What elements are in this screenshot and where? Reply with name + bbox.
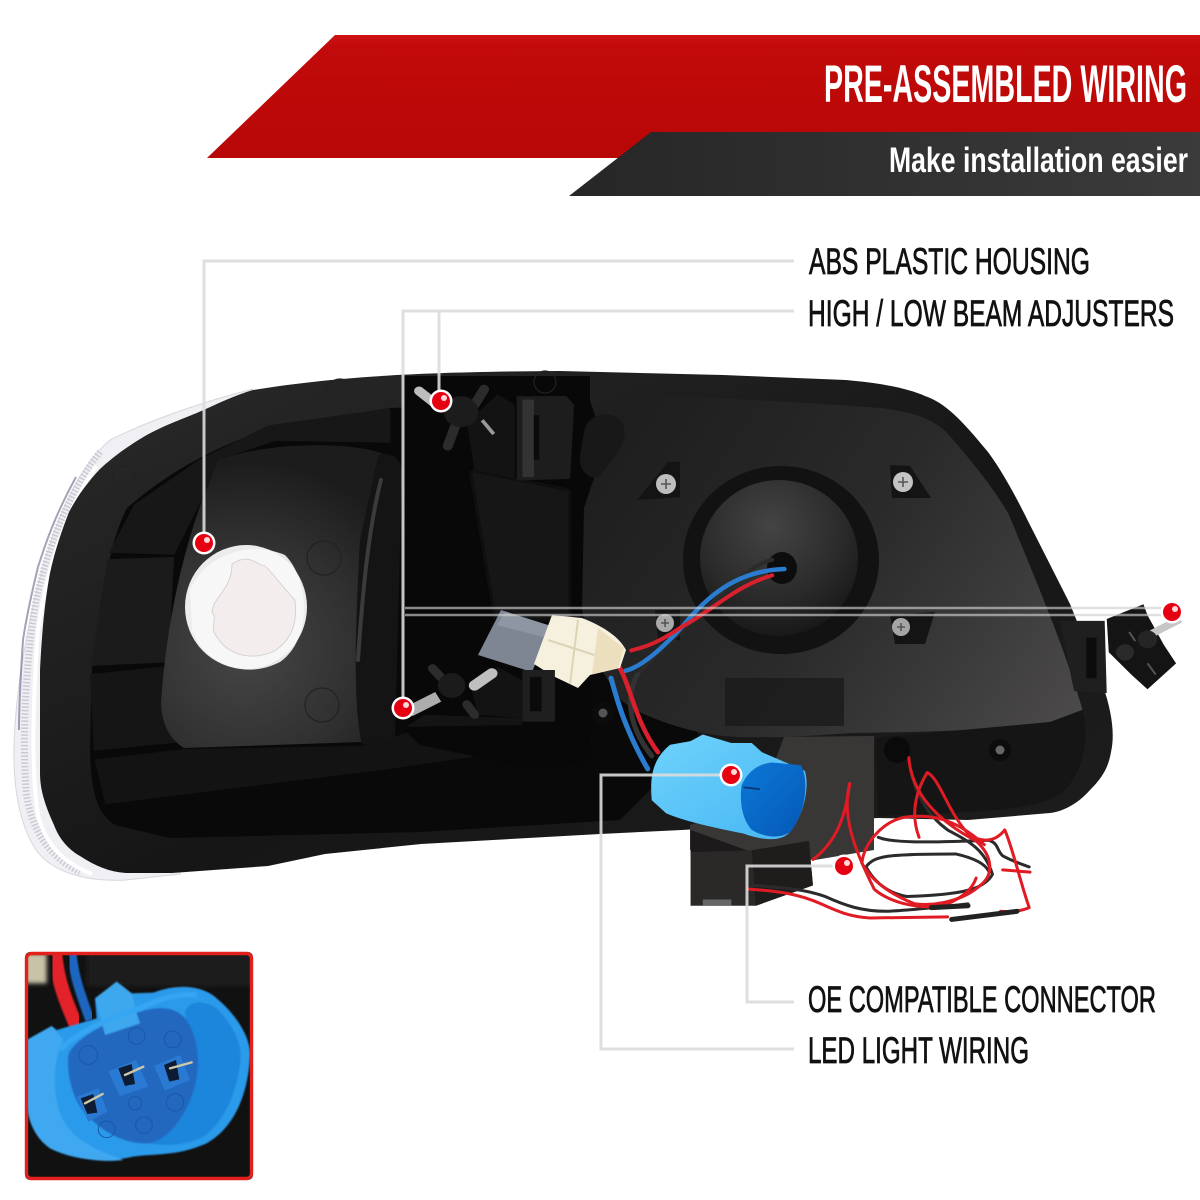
rubber gasket (683, 466, 879, 654)
header banner (207, 35, 1200, 196)
inset: embossed rings (79, 1028, 184, 1138)
middle left panel (91, 557, 174, 666)
marker: housing (192, 532, 216, 554)
slot rib (358, 480, 381, 660)
blue headlight connector (651, 734, 807, 839)
inset border (26, 954, 252, 1178)
right side beam adjuster (1060, 604, 1180, 693)
white and grey plug (478, 610, 626, 688)
plate label recess (725, 678, 844, 726)
lens blue streak (19, 477, 76, 730)
screws (656, 472, 913, 636)
leader: OE connector (747, 866, 844, 1002)
inset: red wire (55, 950, 77, 1027)
bottom screws (592, 702, 1011, 761)
lower beam adjuster (406, 667, 555, 727)
upper left panel (109, 408, 390, 555)
leader: beam adjuster cross line (405, 608, 1172, 615)
clear lens edge (14, 389, 253, 880)
white access cap (185, 545, 307, 670)
marker dots (192, 390, 1184, 878)
rear plate (582, 397, 1082, 737)
LED wiring loom (748, 758, 1030, 919)
marker: upper adjuster (430, 390, 452, 412)
screw bosses (637, 462, 935, 644)
left panels in zoom coordinates (90, 408, 597, 804)
leader lines (204, 261, 1172, 1049)
housing body (40, 371, 1113, 873)
lower left panel (90, 667, 180, 751)
lower right recess (876, 710, 1086, 816)
lower bracket (690, 736, 874, 860)
lens white band (33, 466, 96, 874)
marker: LED wiring (832, 854, 856, 878)
leader: high low beam adjusters (403, 311, 794, 708)
leader: ABS plastic housing (204, 261, 794, 543)
marker: connector (720, 764, 742, 786)
labels (808, 241, 1174, 1071)
lens ribbed band (24, 452, 100, 872)
inset: dark side glow (86, 956, 250, 986)
banner: red ribbon (207, 35, 1200, 158)
horn knob (580, 414, 625, 478)
slot (356, 454, 402, 745)
inset background (25, 952, 253, 1180)
label: LED light wiring: LED LIGHT WIRING (808, 1030, 1029, 1071)
embossed circles (112, 371, 556, 722)
grommet (884, 737, 910, 763)
inset: connector shell (27, 982, 250, 1161)
rubber dome (700, 480, 858, 636)
inset: blue wire (72, 950, 90, 1020)
inset: terminals (77, 1055, 192, 1122)
harness wires (611, 560, 784, 769)
wire grommet (767, 552, 797, 584)
banner: dark ribbon (569, 132, 1200, 196)
bottom strip (95, 729, 597, 804)
centre column sheen (470, 470, 570, 620)
marker: lower adjuster (392, 696, 414, 720)
centre black column (404, 376, 590, 770)
cavity (90, 400, 700, 838)
headlight product illustration (14, 261, 1183, 1049)
inset connector photo (25, 950, 253, 1180)
relay box (691, 830, 813, 906)
marker: right adjuster (1160, 600, 1184, 624)
reflector cap (161, 445, 396, 748)
inset: connector drawing (25, 950, 253, 1161)
leader: LED light wiring (601, 775, 794, 1049)
upper beam adjuster (419, 389, 574, 481)
inset: beige blob (25, 953, 47, 983)
